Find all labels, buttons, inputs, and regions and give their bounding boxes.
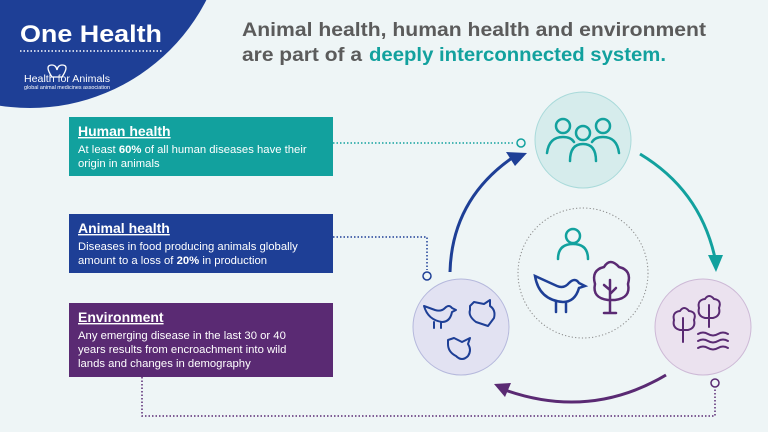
panel: animal health: Animal health (78, 220, 170, 236)
panel: human health: Human health (78, 123, 171, 139)
title: Animal health, human health and environment (242, 20, 707, 41)
circle: human (535, 92, 631, 188)
panel: environment (69, 303, 333, 377)
title: are part of a (242, 45, 362, 66)
logo title: One Health (20, 21, 162, 48)
arrow: animal to human (450, 152, 527, 272)
panel: environment: Environment (78, 309, 164, 325)
center circle (518, 208, 648, 338)
header blob (0, 0, 228, 108)
panel: environment: years results from encroachment into wild (78, 344, 286, 356)
panel: human health (69, 117, 333, 176)
panel: animal health (69, 214, 333, 273)
panel: environment: lands and changes in demography (78, 358, 251, 370)
logo (24, 65, 110, 91)
panel: environment: Any emerging disease in the last 30 or 40 (78, 330, 286, 342)
panel: human health: origin in animals (78, 158, 160, 170)
logo: Health for Animals (24, 73, 110, 85)
title: deeply interconnected system. (369, 45, 666, 66)
panel: animal health: Diseases in food producing animals globally (78, 241, 298, 253)
panel: human health: At least 60% of all human diseases have their (78, 144, 307, 156)
circle: animals (413, 279, 509, 375)
circle: environment (655, 279, 751, 375)
arrow: environment to animal (494, 375, 666, 402)
logo: global animal medicines association (24, 85, 110, 91)
panel: animal health: amount to a loss of 20% in production (78, 255, 267, 267)
arrow: human to environment (640, 154, 723, 272)
title (242, 20, 707, 66)
connectors (142, 143, 715, 416)
